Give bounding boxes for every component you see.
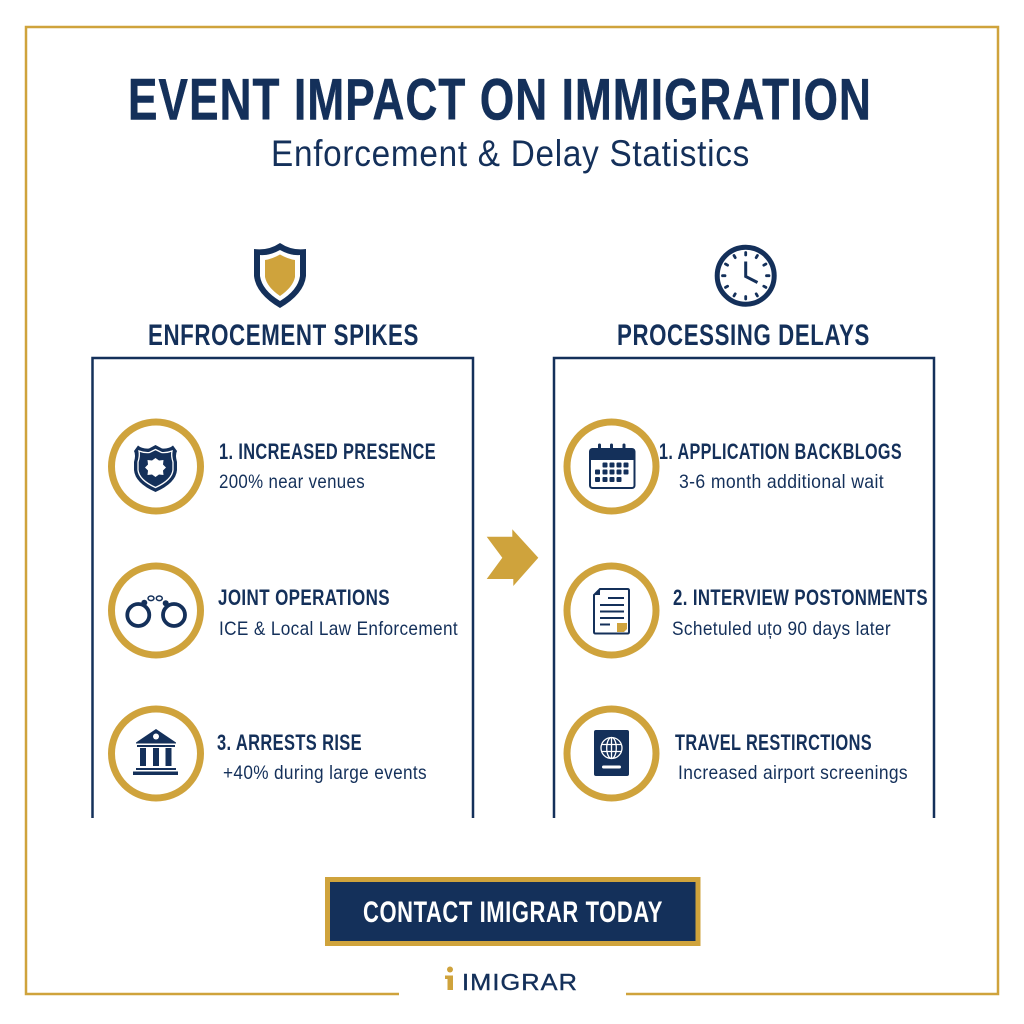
item: interview postponements [567,566,928,655]
item: travel restrictions: TRAVEL RESTIRCTIONS [675,730,872,755]
call-to-action button: CONTACT IMIGRAR TODAY [363,896,663,929]
item: increased presence: 200% near venues [219,471,365,493]
icon: processing clock [717,247,774,304]
panel: enforcement spikes [92,358,473,818]
icon: enforcement shield [254,243,306,308]
item: increased presence: 1. INCREASED PRESENCE [219,439,436,464]
item: interview postponements: Schetuled uțo 90 days later [672,618,891,640]
item: interview postponements: 2. INTERVIEW POSTONMENTS [673,585,928,610]
item: joint operations [112,566,458,655]
item: travel restrictions: Increased airport screenings [678,762,908,784]
heading: enforcement spikes: ENFROCEMENT SPIKES [148,319,419,352]
item: increased presence [112,422,436,511]
item: application backlogs [567,422,902,511]
icon: calendar [590,445,634,488]
item: joint operations: ICE & Local Law Enforcement [219,618,458,640]
arrow between panels [487,529,538,586]
item: arrests rise: 3. ARRESTS RISE [217,730,362,755]
heading: processing delays: PROCESSING DELAYS [617,319,870,352]
item: arrests rise: +40% during large events [223,762,427,784]
item: application backlogs: 1. APPLICATION BACKBLOGS [659,439,902,464]
item: application backlogs: 3-6 month additional wait [679,471,884,493]
icon: passport [594,730,629,776]
icon: government building [133,729,178,775]
icon: document [594,589,629,634]
item: travel restrictions [567,709,908,798]
panel: processing delays [554,358,934,818]
item: joint operations: JOINT OPERATIONS [218,585,390,610]
item: arrests rise [112,709,427,798]
icon: handcuffs [127,596,185,626]
call-to-action button [328,880,698,944]
subtitle: Enforcement & Delay Statistics [271,133,750,174]
icon: police badge [134,445,177,492]
logo: Imigrar: IMIGRAR [462,969,578,995]
